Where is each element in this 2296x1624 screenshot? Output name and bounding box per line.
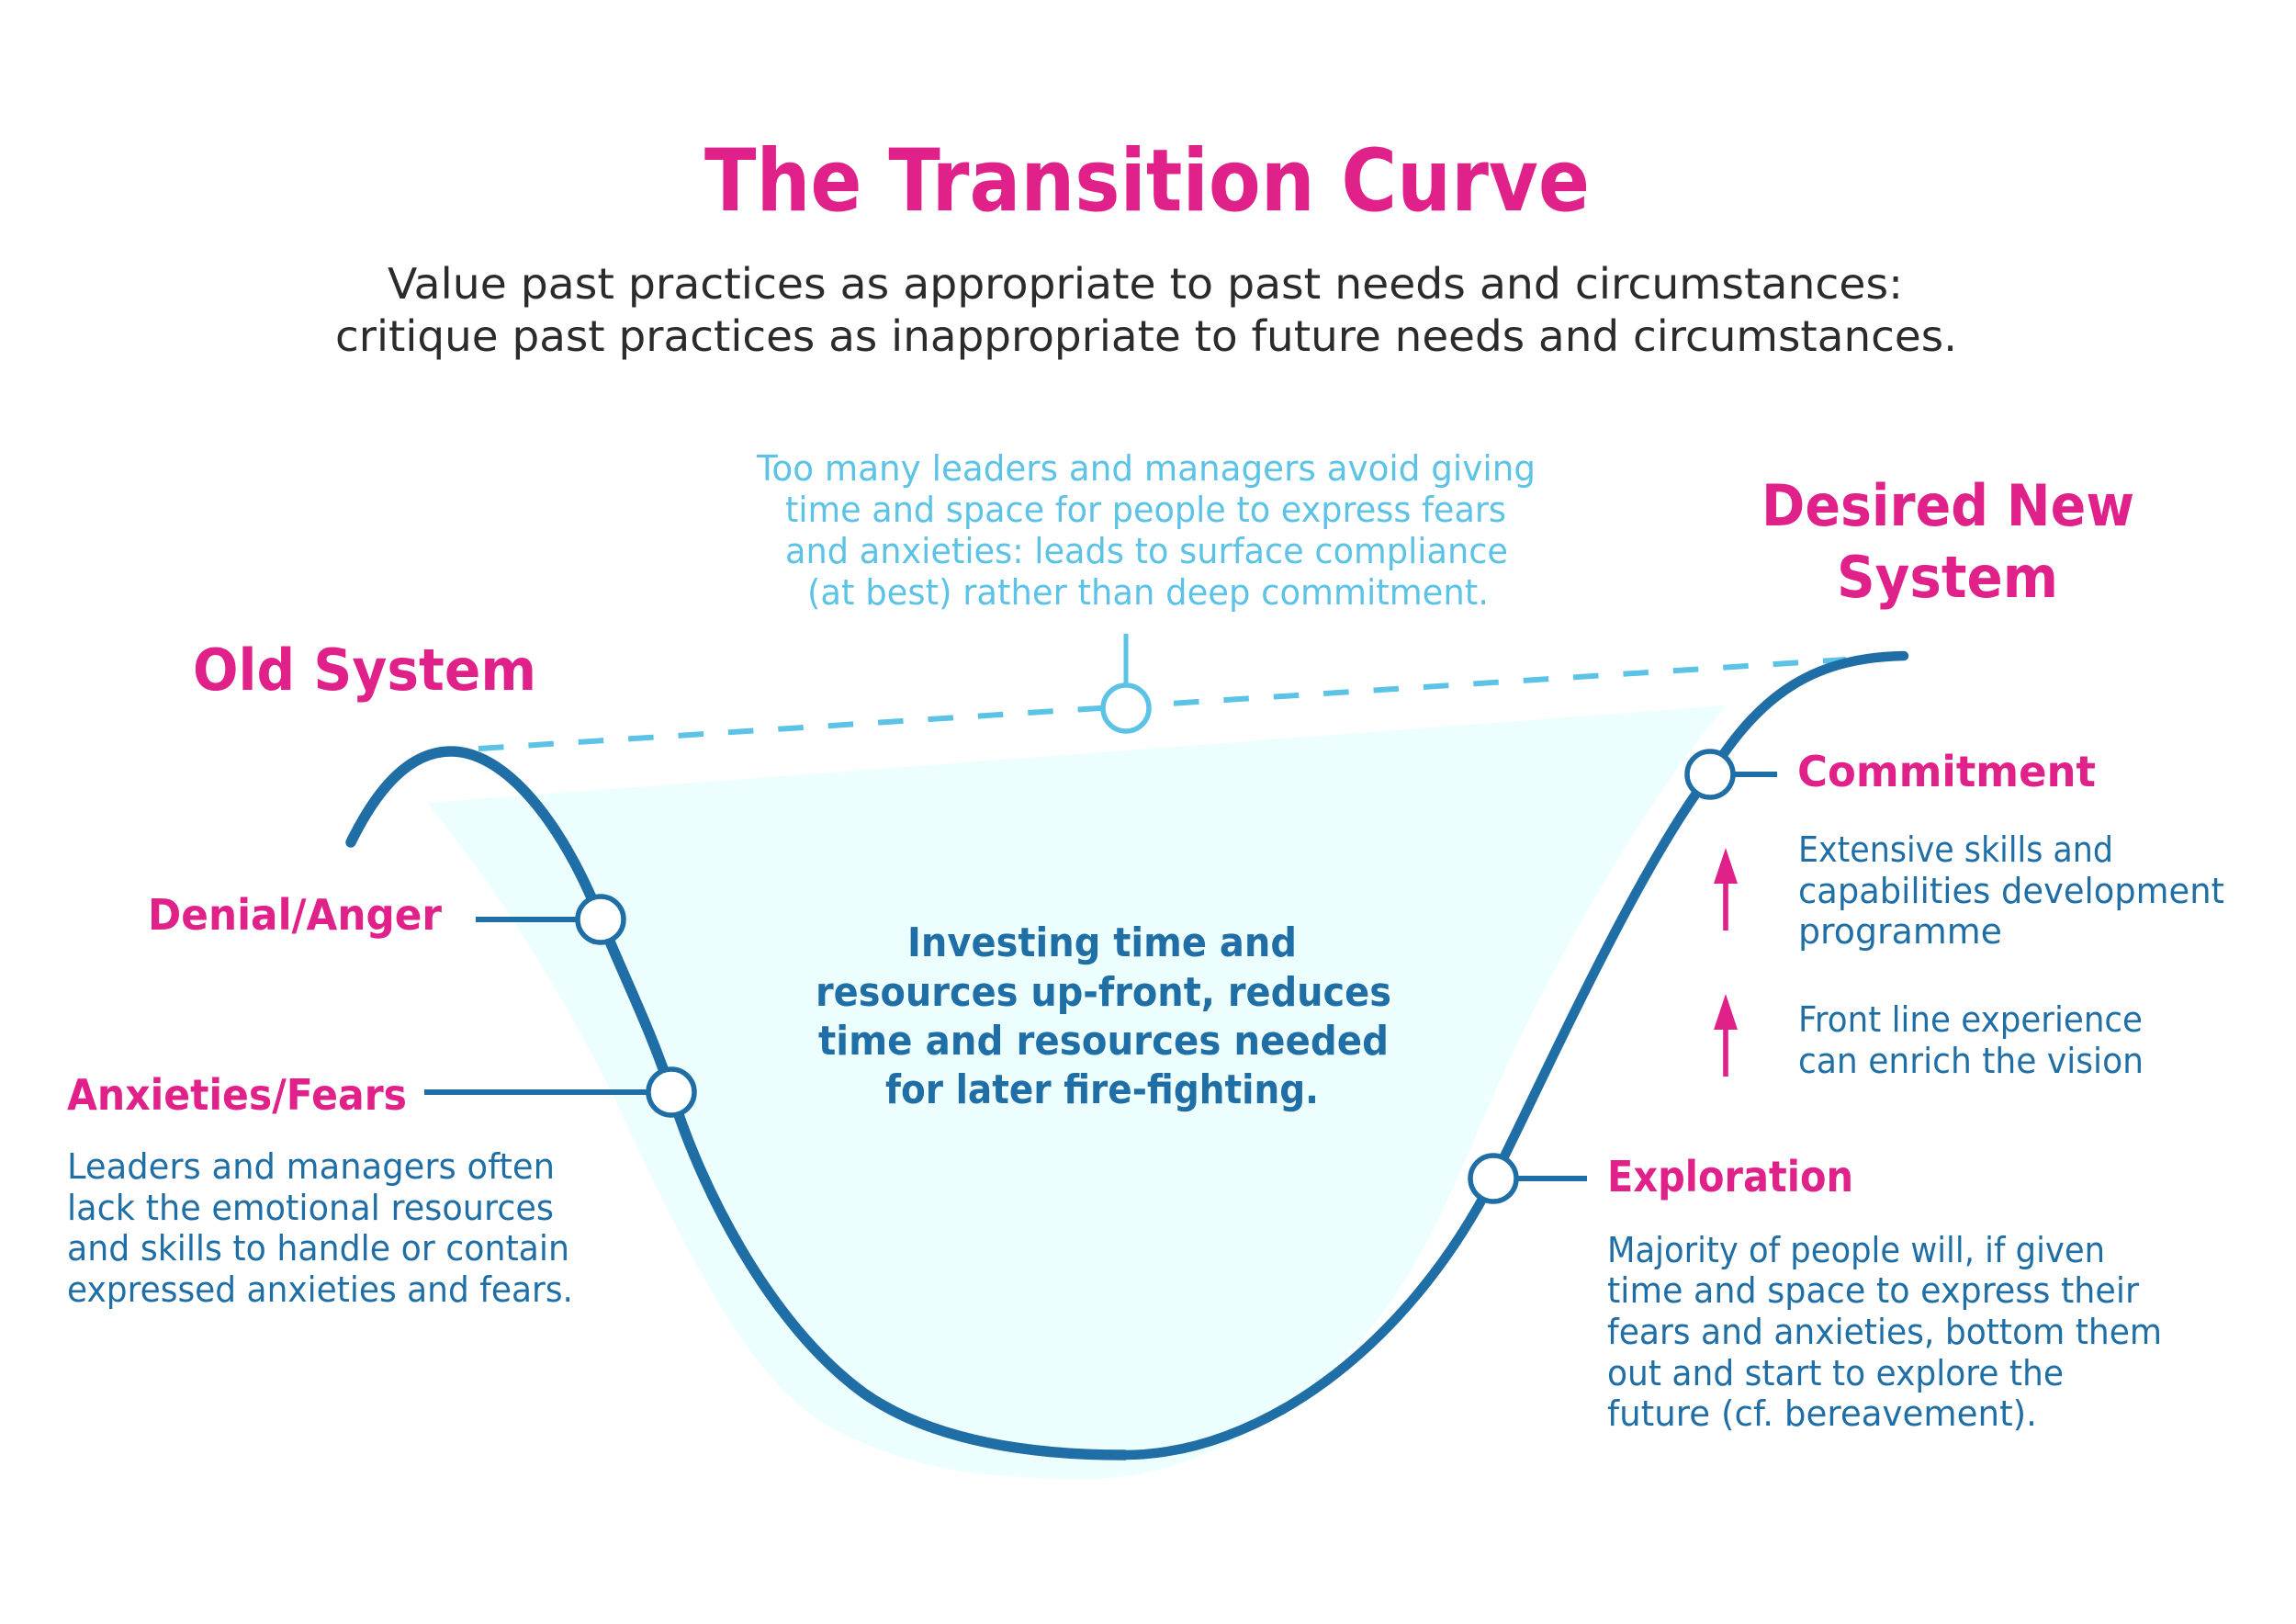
- callout: leaders avoid giving time: time and space for people to express fears: [785, 490, 1506, 530]
- text: Exploration description: out and start to explore the: [1607, 1353, 2064, 1393]
- label: Anxieties/Fears: Anxieties/Fears: [67, 1070, 407, 1120]
- text: Exploration description: fears and anxieties, bottom them: [1607, 1312, 2162, 1352]
- text: front line experience: Front line experience: [1798, 999, 2143, 1040]
- label: Exploration: [1470, 1152, 1853, 1201]
- transition curve: [351, 656, 1904, 1455]
- label: Anxieties/Fears: [67, 1069, 694, 1120]
- heading: Old System: Old System: [193, 637, 536, 704]
- marker: callout on dashed line: [1103, 634, 1149, 731]
- text: skills development: [1798, 829, 2224, 952]
- text: skills development: programme: [1798, 911, 2002, 952]
- callout: leaders avoid giving time: Too many leaders and managers avoid giving: [756, 448, 1536, 489]
- text: Exploration description: Majority of people will, if given: [1607, 1230, 2105, 1270]
- text: central message: time and resources needed: [818, 1018, 1389, 1065]
- text: skills development: Extensive skills and: [1798, 829, 2113, 870]
- text: front line experience: [1798, 999, 2144, 1081]
- label: Exploration: Exploration: [1607, 1152, 1853, 1201]
- text: Anxieties/Fears description: and skills to handle or contain: [67, 1228, 569, 1269]
- text: central message: [816, 919, 1391, 1113]
- text: central message: resources up-front, reduces: [816, 969, 1391, 1016]
- heading: Desired New System: [1761, 472, 2134, 611]
- text: Anxieties/Fears description: expressed anxieties and fears.: [67, 1269, 573, 1310]
- heading: Desired New System: System: [1837, 544, 2058, 611]
- text: central message: for later fire-fighting.: [885, 1066, 1319, 1113]
- text: Anxieties/Fears description: lack the emotional resources: [67, 1188, 554, 1228]
- arrow: front line experience: [1714, 994, 1738, 1077]
- callout: leaders avoid giving time: and anxieties: leads to surface compliance: [785, 531, 1508, 571]
- label: Commitment: Commitment: [1797, 747, 2096, 796]
- text: Exploration description: [1607, 1230, 2162, 1434]
- subtitle: Value past practices as appropriate to past needs and circumstances:: [388, 259, 1903, 309]
- text: Exploration description: future (cf. bereavement).: [1607, 1393, 2037, 1434]
- label: Denial/Anger: [148, 890, 624, 942]
- text: central message: Investing time and: [907, 919, 1297, 966]
- text: front line experience: can enrich the vision: [1798, 1041, 2144, 1081]
- subtitle: [335, 259, 1957, 361]
- subtitle: critique past practices as inappropriate to future needs and circumstances.: [335, 311, 1957, 361]
- text: Exploration description: time and space to express their: [1607, 1270, 2139, 1311]
- dashed line: old system to desired new system: [478, 660, 1846, 749]
- callout: leaders avoid giving time: [756, 448, 1536, 613]
- arrow: skills development: [1714, 848, 1738, 930]
- text: skills development: capabilities development: [1798, 871, 2224, 911]
- label: Denial/Anger: Denial/Anger: [148, 890, 442, 940]
- heading: Desired New System: Desired New: [1761, 472, 2134, 539]
- callout: leaders avoid giving time: (at best) rather than deep commitment.: [807, 572, 1489, 613]
- panel: investment area under curve: [427, 705, 1727, 1479]
- text: Anxieties/Fears description: Leaders and managers often: [67, 1146, 555, 1187]
- title: The Transition Curve: [704, 131, 1590, 231]
- text: Anxieties/Fears description: [67, 1146, 573, 1310]
